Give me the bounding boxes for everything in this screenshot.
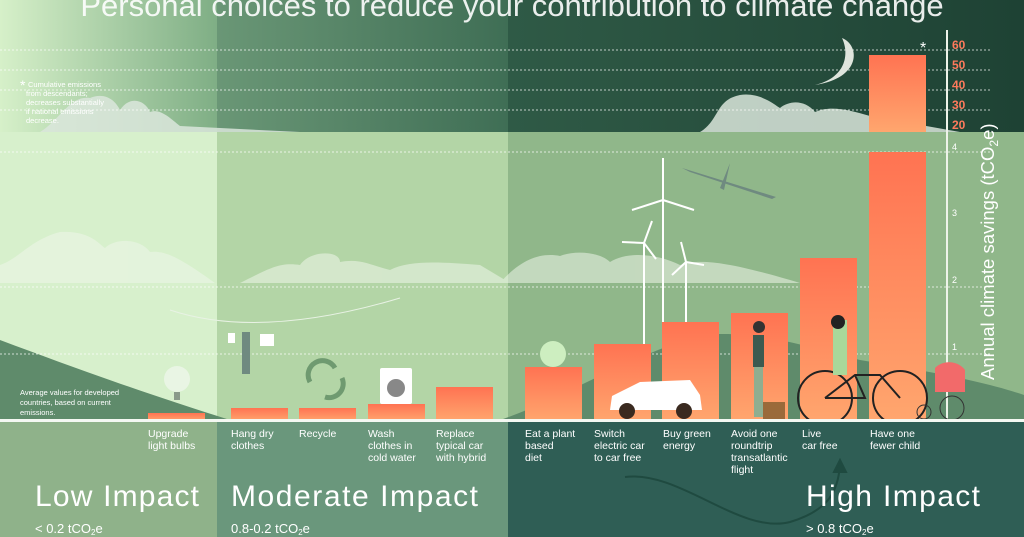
upper axis labels: 40	[952, 78, 966, 92]
bar labels: fewer child	[870, 440, 920, 452]
bar labels: Live	[802, 428, 821, 440]
hills	[0, 334, 1024, 420]
icon: wind turbines	[622, 158, 704, 344]
category headings: 2	[91, 528, 96, 537]
axis title: 2	[987, 140, 1001, 147]
bar labels: Recycle	[299, 428, 337, 440]
upper axis labels: 50	[952, 58, 966, 72]
category headings: 2	[862, 528, 867, 537]
icon: washing machine	[380, 368, 412, 404]
icon: pram	[917, 362, 965, 420]
lower axis labels: 4	[952, 142, 957, 152]
category headings: 2	[298, 528, 303, 537]
icon: moon	[815, 38, 854, 85]
lower axis labels: 2	[952, 275, 957, 285]
bar labels: diet	[525, 452, 542, 464]
bar labels: cold water	[368, 452, 416, 464]
bar labels: with hybrid	[435, 452, 486, 464]
bar: one fewer child (upper)	[869, 55, 926, 132]
footnote: cumulative emissions: from descendants;	[26, 89, 88, 98]
bar labels: typical car	[436, 440, 484, 452]
footnote: cumulative emissions: if national emissions	[26, 107, 94, 116]
note: average values: emissions.	[20, 408, 55, 417]
category headings: Moderate Impact	[231, 480, 479, 513]
bar labels: light bulbs	[148, 440, 195, 452]
background: top band	[0, 0, 1024, 132]
bar labels: Hang dry	[231, 428, 274, 440]
lower axis labels	[952, 142, 957, 352]
bar labels: clothes	[231, 440, 264, 452]
bar labels: Avoid one	[731, 428, 778, 440]
axis title: Annual climate savings (tCO	[977, 147, 998, 380]
icon: light bulb	[164, 366, 190, 400]
category headings: e	[303, 521, 310, 536]
icon: bicycle	[798, 315, 927, 425]
category headings: e	[866, 521, 874, 536]
bar labels: car free	[802, 440, 838, 452]
note: average values: Average values for developed	[20, 388, 119, 397]
clouds top	[40, 95, 960, 132]
lower axis labels: 1	[952, 342, 957, 352]
background: middle band	[0, 132, 1024, 422]
bar labels: roundtrip	[731, 440, 773, 452]
category headings: 0.8-0.2 tCO	[231, 521, 298, 536]
clouds middle	[0, 232, 800, 283]
bar labels: to car free	[594, 452, 641, 464]
bottom band	[0, 422, 1024, 537]
bar labels: energy	[663, 440, 696, 452]
icon: man and suitcase	[753, 321, 785, 419]
bar labels: Replace	[436, 428, 475, 440]
axis line	[946, 30, 948, 420]
upper axis labels	[952, 38, 966, 132]
arrow	[625, 460, 846, 524]
category headings	[35, 480, 981, 537]
category headings: e	[95, 521, 103, 536]
bar labels: clothes in	[368, 440, 413, 452]
footnote: cumulative emissions: Cumulative emissions	[28, 80, 101, 89]
asterisk: *	[920, 40, 926, 57]
bar labels: Have one	[870, 428, 915, 440]
category headings: < 0.2 tCO	[35, 521, 91, 536]
category headings: High Impact	[806, 480, 981, 513]
bar labels	[148, 428, 920, 476]
note: average values: countries, based on current	[20, 398, 112, 407]
lower axis labels: 3	[952, 208, 957, 218]
footnote: cumulative emissions: decreases substantially	[26, 98, 104, 107]
bar labels: Eat a plant	[525, 428, 575, 440]
footnote: cumulative emissions: *	[20, 77, 26, 93]
icon: clothes line	[170, 298, 400, 374]
icon: airplane	[682, 163, 776, 199]
category headings: Low Impact	[35, 480, 200, 513]
icon: apple	[540, 341, 566, 367]
bar labels: Upgrade	[148, 428, 188, 440]
bar labels: Switch	[594, 428, 625, 440]
bar labels: Buy green	[663, 428, 711, 440]
baseline	[0, 419, 1024, 422]
bar labels: based	[525, 440, 554, 452]
upper axis labels: 60	[952, 38, 966, 52]
bar labels: Wash	[368, 428, 394, 440]
icon: recycle	[308, 361, 343, 398]
category headings: > 0.8 tCO	[806, 521, 862, 536]
bar labels: transatlantic	[731, 452, 788, 464]
icon: car	[610, 380, 702, 419]
bar labels: electric car	[594, 440, 645, 452]
axis title: e)	[977, 123, 998, 140]
bar labels: flight	[731, 464, 753, 476]
footnote: cumulative emissions: decrease.	[26, 116, 59, 125]
gridlines	[0, 50, 990, 354]
bars	[148, 152, 926, 421]
upper axis labels: 20	[952, 118, 966, 132]
upper axis labels: 30	[952, 98, 966, 112]
